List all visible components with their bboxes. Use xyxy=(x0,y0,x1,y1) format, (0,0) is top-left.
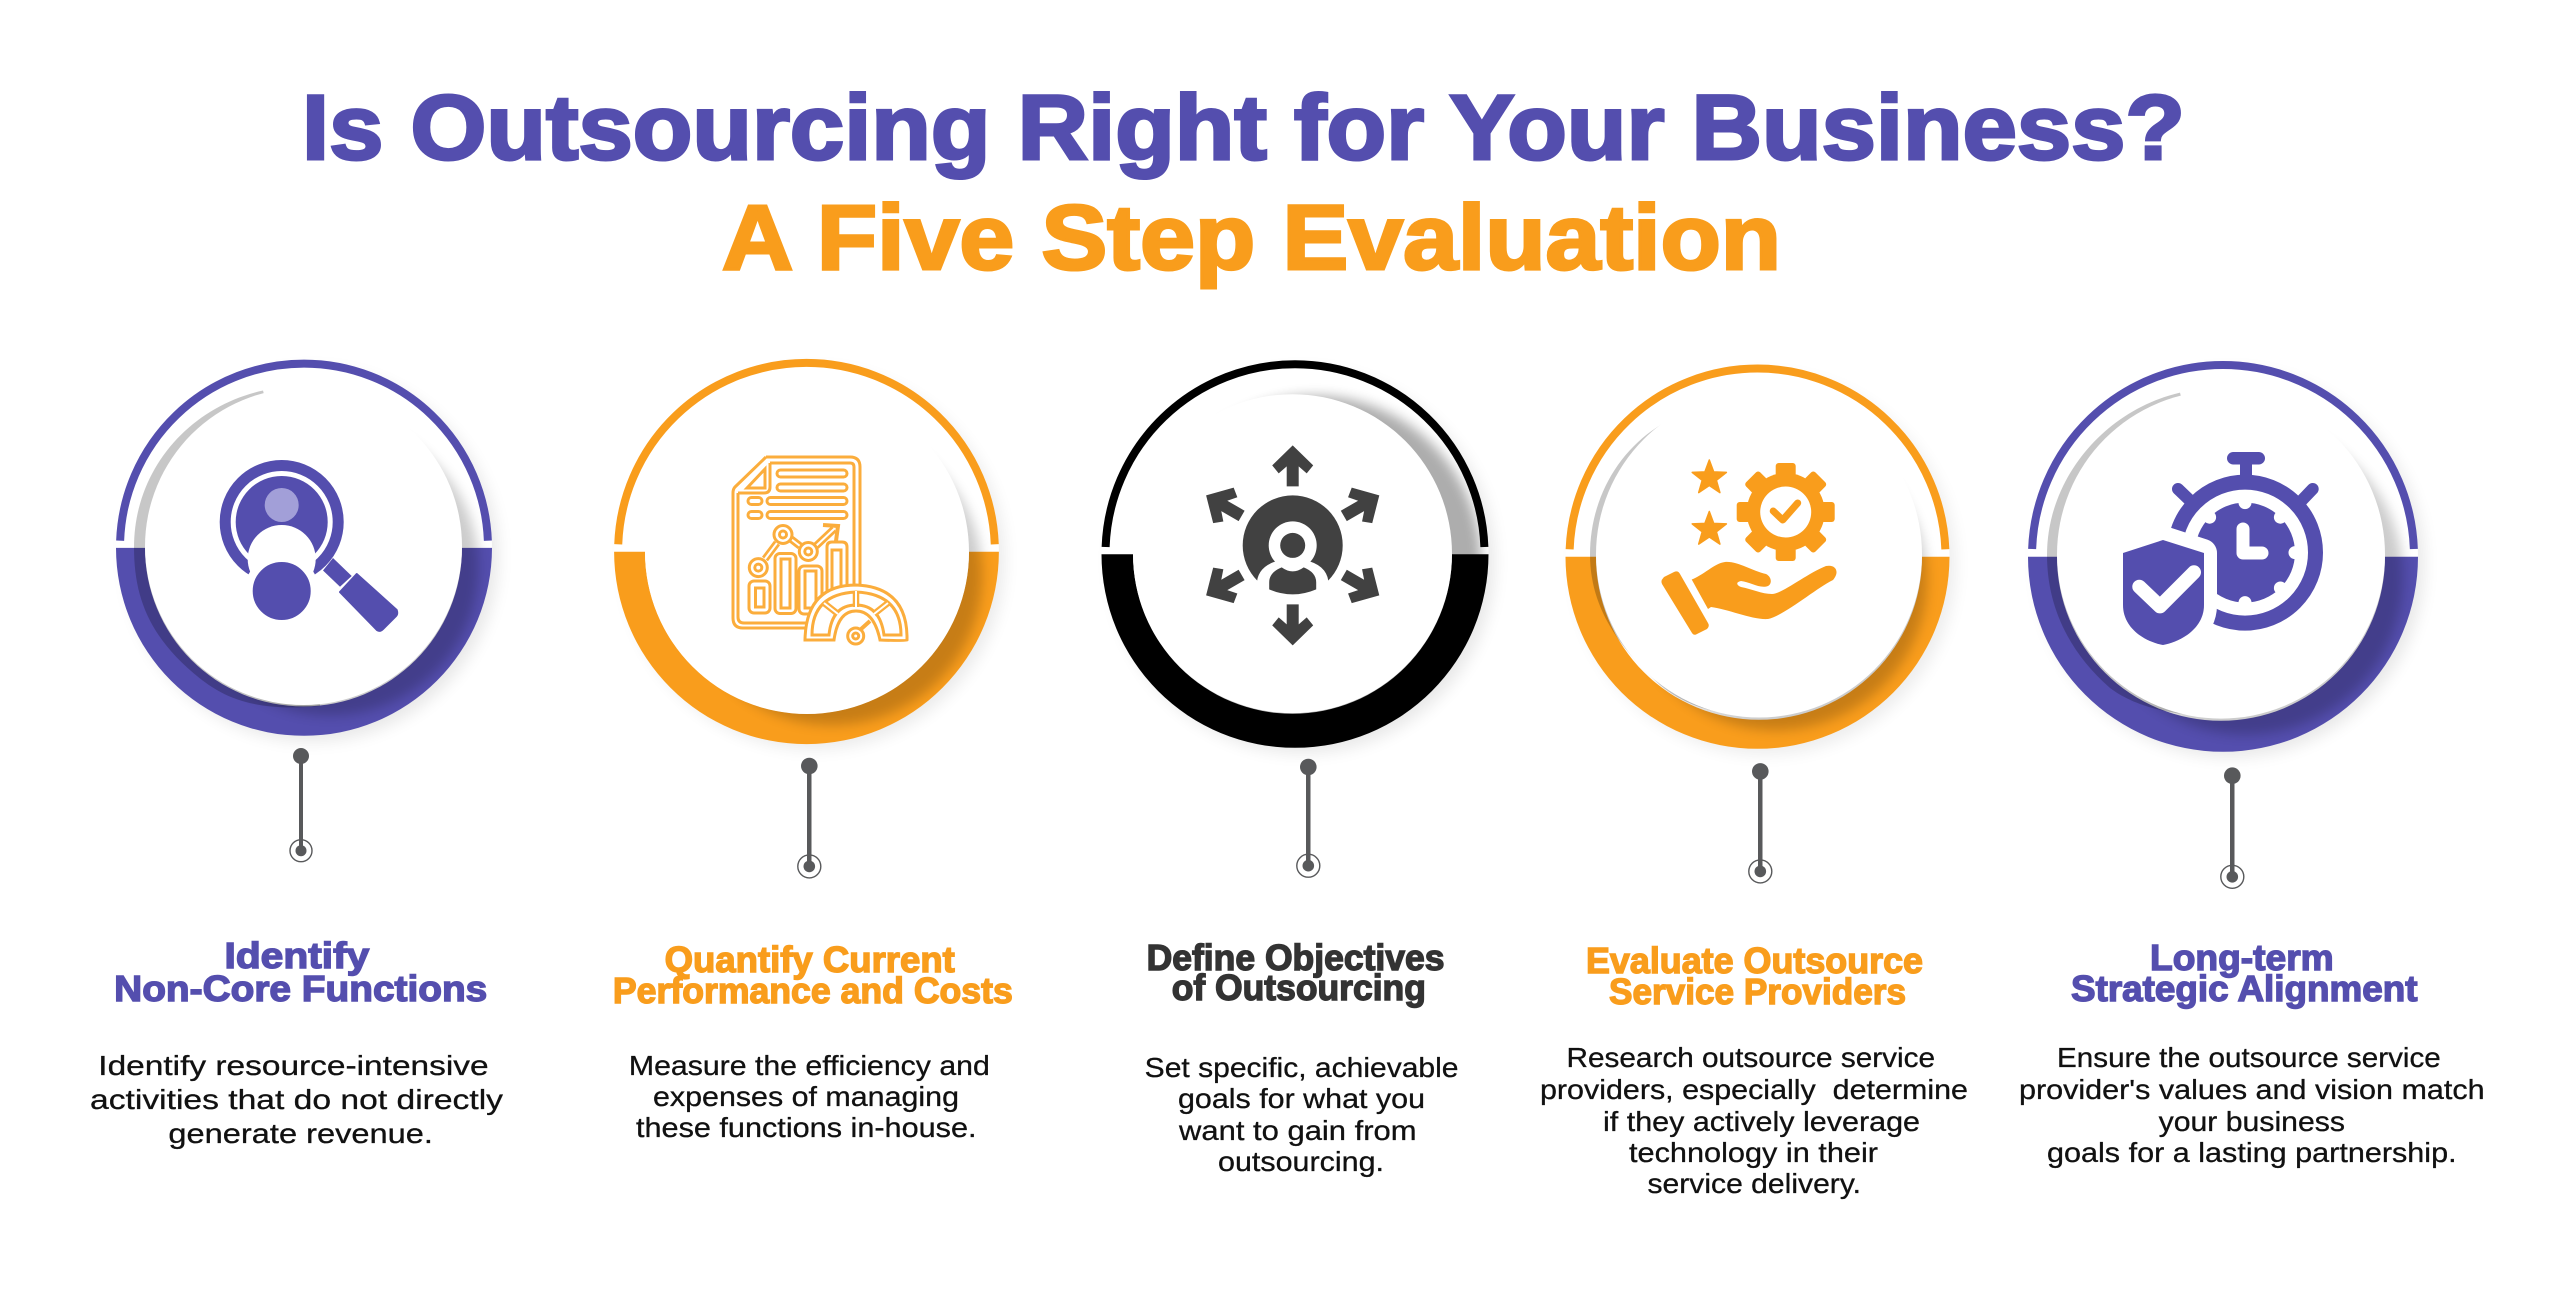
icon: hand with gear and stars xyxy=(1661,460,1837,635)
text: step 5: your business xyxy=(2159,1106,2345,1137)
step 5: long-term alignment xyxy=(2019,365,2485,1168)
step 1: identify non-core functions xyxy=(90,364,503,1149)
step 3: define objectives xyxy=(1102,364,1494,1177)
heading: step 4: Service Providers xyxy=(1609,971,1906,1012)
text: step 3: goals for what you xyxy=(1178,1083,1425,1114)
title: Is Outsourcing Right for Your Business? xyxy=(302,77,2185,179)
ring: step 3 xyxy=(1102,364,1494,753)
ring: step 4 xyxy=(1566,369,1956,755)
heading: step 2: Performance and Costs xyxy=(613,970,1013,1011)
heading: step 4 xyxy=(1586,940,1923,1012)
heading: step 1: Identify xyxy=(224,935,369,976)
connector: step 4 xyxy=(1749,763,1772,883)
icon: stopwatch and shield xyxy=(2123,452,2316,645)
icon: magnifier over person xyxy=(225,466,397,631)
title: A Five Step Evaluation xyxy=(722,187,1781,289)
heading: step 2: Quantify Current xyxy=(665,939,955,980)
heading: step 2 xyxy=(613,939,1013,1011)
text: step 4: providers, especially determine xyxy=(1540,1074,1968,1105)
heading: step 5: Long-term xyxy=(2150,937,2334,978)
connector: step 1 xyxy=(290,748,312,862)
heading: step 5: Strategic Alignment xyxy=(2071,968,2418,1009)
ring: step 1 xyxy=(116,364,498,742)
heading: step 5 xyxy=(2071,937,2418,1009)
text: step 3: want to gain from xyxy=(1178,1115,1417,1146)
text: step 4: if they actively leverage xyxy=(1603,1106,1920,1137)
heading: step 3 xyxy=(1147,937,1444,1008)
heading: step 4: Evaluate Outsource xyxy=(1586,940,1923,981)
text: step 4 xyxy=(1540,1042,1968,1199)
step 2: quantify performance and costs xyxy=(613,363,1013,1143)
text: step 2 xyxy=(629,1050,990,1143)
text: step 1: Identify resource-intensive xyxy=(98,1050,489,1081)
text: step 1: generate revenue. xyxy=(168,1118,433,1149)
text: step 1 xyxy=(90,1050,503,1149)
text: step 1: activities that do not directly xyxy=(90,1084,503,1115)
icon: person with arrows xyxy=(1196,445,1390,645)
text: step 2: these functions in-house. xyxy=(636,1112,976,1143)
heading: step 3: Define Objectives xyxy=(1147,937,1444,978)
connector: step 5 xyxy=(2221,767,2244,888)
text: step 5 xyxy=(2019,1042,2485,1168)
step 4: evaluate providers xyxy=(1540,369,1968,1199)
text: step 3 xyxy=(1145,1052,1458,1177)
text: step 5: Ensure the outsource service xyxy=(2057,1042,2441,1073)
text: step 2: expenses of managing xyxy=(653,1081,959,1112)
ring: step 2 xyxy=(614,363,1004,749)
title xyxy=(302,77,2185,289)
heading: step 1 xyxy=(114,935,487,1009)
text: step 5: provider's values and vision match xyxy=(2019,1074,2485,1105)
text: step 3: Set specific, achievable xyxy=(1145,1052,1458,1083)
text: step 2: Measure the efficiency and xyxy=(629,1050,990,1081)
text: step 5: goals for a lasting partnership. xyxy=(2047,1137,2457,1168)
text: step 3: outsourcing. xyxy=(1218,1146,1384,1177)
text: step 4: technology in their xyxy=(1629,1137,1878,1168)
text: step 4: Research outsource service xyxy=(1566,1042,1935,1073)
ring: step 5 xyxy=(2028,365,2424,757)
text: step 4: service delivery. xyxy=(1648,1168,1861,1199)
heading: step 3: of Outsourcing xyxy=(1172,967,1426,1008)
heading: step 1: Non-Core Functions xyxy=(114,968,487,1009)
icon: report with chart and gauge xyxy=(733,457,907,644)
connector: step 3 xyxy=(1297,759,1320,877)
connector: step 2 xyxy=(798,758,821,878)
